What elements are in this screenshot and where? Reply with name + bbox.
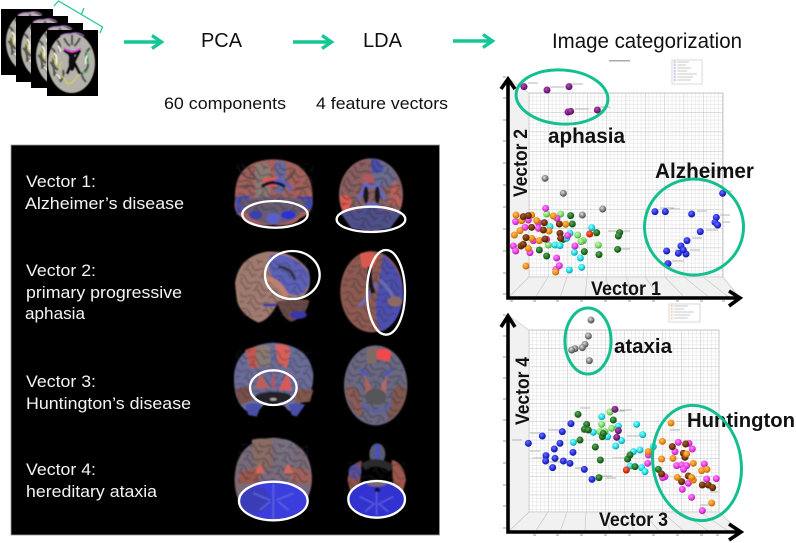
legend box [669, 304, 700, 322]
label: vector 4: Vector 4 [513, 357, 534, 425]
tick marks [503, 315, 719, 535]
brain images, vector 3 and 4 [234, 343, 407, 520]
text: vector 2: Vector 2: [26, 261, 96, 280]
point labels [512, 408, 718, 505]
ring: aphasia [514, 67, 610, 127]
text: vector 1: Vector 1: [26, 172, 96, 191]
arrow: PCA to LDA [293, 36, 332, 48]
brain 4: axial tilted [340, 251, 403, 332]
brain 5: coronal [234, 343, 313, 417]
label: vector 2: Vector 2 [511, 129, 532, 197]
heading: PCA: PCA [201, 30, 243, 52]
data points: aphasia [520, 83, 601, 115]
highlight ellipse [367, 250, 405, 335]
brain 1: coronal [235, 159, 313, 225]
brain 7: posterior coronal [235, 438, 312, 520]
ring: Alzheimer [644, 179, 744, 275]
chart title [609, 60, 630, 62]
label: Alzheimer: Alzheimer [655, 160, 754, 183]
left wall and floor [508, 315, 740, 532]
arrow: stack to PCA [124, 36, 162, 48]
label: ataxia: ataxia [614, 336, 673, 358]
highlight ellipse [348, 481, 405, 518]
data points: other groups [510, 175, 623, 275]
axes arrows [501, 316, 741, 540]
highlight ellipse [250, 370, 297, 405]
text: vector 1: Alzheimer’s disease [25, 194, 184, 213]
ring: ataxia [565, 308, 611, 374]
label: aphasia: aphasia [548, 125, 625, 148]
legend box [672, 60, 702, 84]
chart: vector 1 vs vector 2 [501, 60, 754, 306]
label: Huntington: Huntington [687, 410, 795, 432]
data points: other groups [525, 406, 720, 514]
data points: Alzheimer [651, 190, 726, 267]
heading: image categorization: Image categorization [552, 30, 742, 53]
label: vector 1: Vector 1 [591, 279, 661, 300]
left wall and floor [508, 78, 740, 298]
brain 8: inferior axial [347, 443, 406, 517]
axes arrows [501, 79, 740, 306]
highlight ellipse [242, 201, 308, 228]
point labels [528, 83, 732, 261]
plot back wall grid [529, 93, 723, 277]
text: vector 4: hereditary ataxia [26, 482, 158, 501]
highlight ellipse [239, 482, 308, 520]
text: vector 2: aphasia [25, 304, 86, 323]
text: 4 feature vectors: 4 feature vectors [316, 94, 448, 113]
text: vector 4: Vector 4: [26, 460, 96, 479]
brain 2: axial [339, 158, 403, 232]
y axis tick marks [503, 77, 725, 301]
text: vector 3: Vector 3: [26, 372, 96, 391]
text: 60 components: 60 components [164, 94, 286, 113]
text: vector 2: primary progressive [26, 283, 182, 302]
arrow: LDA to categorization [453, 34, 492, 48]
brain images, vector 1 and 2 [235, 158, 405, 335]
brain 6: axial [344, 345, 407, 425]
text: vector 3: Huntington’s disease [26, 394, 191, 413]
ring: Huntington [644, 398, 750, 528]
highlight ellipse [265, 251, 320, 299]
plot back wall grid [529, 330, 719, 512]
panel: brain vectors [11, 145, 440, 535]
label: vector 3: Vector 3 [599, 510, 668, 531]
heading: LDA: LDA [363, 30, 403, 52]
data points: ataxia [568, 316, 594, 364]
highlight ellipse [337, 207, 405, 232]
brain 3: sagittal tilted [235, 252, 310, 323]
image stack: MRI slices [1, 9, 98, 96]
chart: vector 3 vs vector 4 [501, 304, 795, 540]
bracket above stack [54, 1, 102, 33]
